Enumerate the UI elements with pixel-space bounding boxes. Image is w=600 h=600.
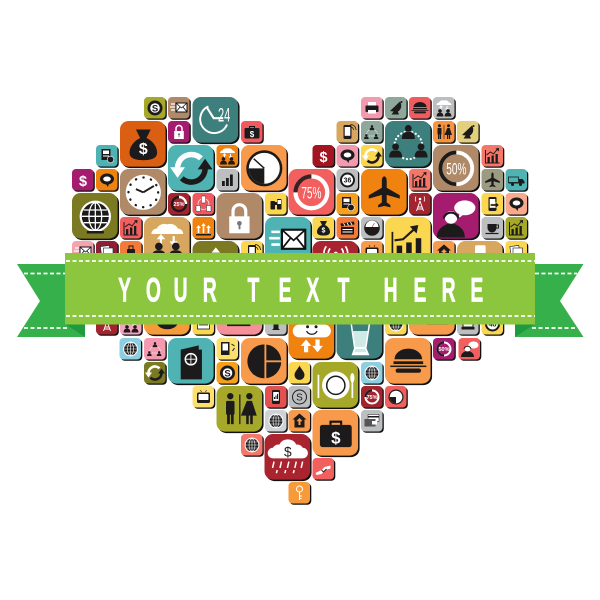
- icon tile: teal 24 hours: 24: [218, 104, 230, 126]
- icon tile: maroon documents: [96, 241, 119, 264]
- icon tile: money bag: [120, 121, 167, 168]
- icon tile: dark red dollar: [312, 145, 335, 168]
- icon tile: salmon chart: [482, 145, 504, 168]
- icon tile: sage network: [361, 121, 384, 144]
- icon tile: tan mail: [168, 97, 191, 120]
- icon tile: big teal refresh: [168, 145, 215, 192]
- icon tile: orange dollar coin: [216, 362, 239, 385]
- icon tile: money bag: $: [139, 141, 148, 158]
- icon tile: orange dollar coin: S: [224, 368, 231, 380]
- icon tile: big orange cloud smile: [288, 313, 336, 360]
- ribbon tail: right: [515, 264, 584, 337]
- icon tile: yellow television: [192, 386, 215, 409]
- icon tile: yellow 48 ring: 48: [489, 322, 496, 328]
- icon tile: big tan people with cloud: [144, 217, 191, 264]
- icon tile: big red money rain cloud: $: [284, 444, 292, 459]
- icon tile: grey bar chart: [216, 169, 239, 192]
- icon tile: grey coffee cup: [482, 217, 504, 240]
- icon tile: pink network: [144, 338, 167, 361]
- icon tile: olive chart: [506, 217, 528, 240]
- icon tile: orange document: [336, 193, 359, 216]
- icon tile: big orange clock: [241, 145, 288, 192]
- icon tile: orange clapperboard: [336, 217, 359, 240]
- icon tile: yellow money bag: $: [322, 228, 326, 234]
- icon tile: grey credit cards: [361, 410, 384, 433]
- icon tile: olive dollar coin: S: [152, 104, 158, 114]
- icon tile: magenta 50 percent ring: [433, 338, 456, 361]
- icon tile: teal document: [96, 145, 119, 168]
- icon tile: khaki satellite dish: [457, 121, 480, 144]
- icon tile: big orange briefcase: [312, 410, 360, 457]
- icon tile: yellow documents: [506, 241, 528, 264]
- icon tile: yellow phone forward: [482, 193, 504, 216]
- icon tile: yellow 48 ring: [482, 313, 504, 336]
- icon tile: big red 75 percent ring: [288, 169, 336, 216]
- icon tile: pink people: [120, 313, 143, 336]
- icon tile: salmon rising chart: [409, 169, 432, 192]
- banner title text: YOURTEXTHERE: [118, 271, 483, 309]
- icon tile: salmon globe: [241, 434, 264, 457]
- icon tile: big pink monitor: [216, 289, 264, 336]
- icon tile: yellow binoculars: [265, 193, 288, 216]
- icon tile: red headset agent: [458, 338, 481, 361]
- icon tile: dark red dollar: $: [320, 149, 328, 166]
- icon tile: red phone chart: [265, 386, 288, 409]
- icon tile: dark red 25 percent ring: 25%: [173, 202, 185, 208]
- icon tile: big orange bottom bar: [409, 289, 456, 336]
- icon tile: orange share: [288, 410, 311, 433]
- icon tile: big teal passport: [168, 338, 215, 385]
- icon tile: yellow document arrow: [216, 338, 239, 361]
- icon tile: grey dollar coin: S: [296, 392, 303, 404]
- icon tile: big orange burger: [385, 338, 432, 385]
- icon tile: orange key: [288, 482, 311, 505]
- icon tile: big red money rain cloud: [264, 434, 312, 481]
- icon tile: olive dollar coin: [144, 97, 167, 120]
- icon tile: light blue globe right: [361, 362, 384, 385]
- icon tile: grey 36 ring: [336, 169, 359, 192]
- icon tile: red clock: [385, 386, 408, 409]
- icon tile: big olive plate setting: [312, 362, 360, 409]
- icon tile: big tan 50 percent ring: [433, 145, 480, 192]
- icon tile: grey 36 ring: 36: [344, 178, 351, 184]
- icon tile: magenta 50 percent ring: 50%: [438, 347, 450, 353]
- icon tile: big orange pie chart: [241, 338, 288, 385]
- icon tile: big teal people circle: [385, 121, 432, 168]
- icon tile: orange toilets: [433, 121, 456, 144]
- icon tile: big tan lock: [216, 193, 264, 240]
- icon tile: dark red antenna: [409, 193, 432, 216]
- icon tile: orange growth arrows: [192, 217, 215, 240]
- icon tile: grey people: [433, 97, 456, 120]
- icon tile: light grey globe: [265, 410, 288, 433]
- icon tile: peach speech bubble: [506, 193, 528, 216]
- icon tile: grey gauge: [361, 217, 384, 240]
- icon tile: yellow globe: [385, 313, 408, 336]
- icon tile: orange speech bubble: [96, 169, 119, 192]
- icon tile: magenta lock: [168, 121, 191, 144]
- icon tile: big orange briefcase: $: [331, 428, 341, 447]
- icon tile: pink speech bubble: [336, 145, 359, 168]
- icon tile: big yellow growth chart: [385, 217, 432, 264]
- icon tile: grey dollar coin: [288, 386, 311, 409]
- icon tile: teal 24 hours: [192, 97, 240, 144]
- icon tile: red briefcase: [241, 121, 264, 144]
- icon tile: yellow refresh: [361, 145, 384, 168]
- icon tile: red rising chart: [120, 217, 143, 240]
- icon tile: taupe airplane: [482, 169, 504, 192]
- ribbon tail: left: [17, 264, 85, 337]
- icon tile: magenta dollar: $: [79, 173, 88, 190]
- icon tile: yellow water drop: [288, 362, 311, 385]
- banner: green ribbon body: [65, 253, 535, 324]
- icon tile: big tan phone: [457, 241, 504, 288]
- icon tile: big teal mail: [265, 217, 312, 264]
- icon tile: magenta dollar: [72, 169, 95, 192]
- icon tile: big tan clock: [120, 169, 167, 216]
- icon tile: sage satellite dish: [385, 97, 408, 120]
- icon tile: grey monitor: [457, 313, 480, 336]
- icon tile: big orange airplane: [361, 169, 408, 216]
- icon tile: red linked devices: [192, 193, 215, 216]
- icon tile: orange share arrow: [433, 241, 456, 264]
- icon tile: red briefcase: $: [250, 130, 255, 139]
- icon tile: grey pedestal: [265, 313, 288, 336]
- icon tile: big tan 50 percent ring: 50%: [446, 160, 466, 179]
- icon tile: big olive globe: [72, 193, 119, 240]
- icon tile: orange television: [361, 241, 384, 264]
- icon tile: pink mail: [72, 241, 95, 264]
- icon tile: dark red antenna lower: [96, 313, 119, 336]
- icon tile: light blue globe: [120, 338, 142, 361]
- icon tile: dark red 75 percent ring: 75%: [366, 395, 378, 401]
- icon tile: orange people: [216, 145, 239, 168]
- icon tile: big olive toilets: [216, 386, 264, 433]
- icon tile: big dark red signal: [312, 241, 360, 288]
- icon tile: olive refresh: [144, 362, 167, 385]
- icon tile: yellow money bag: [312, 217, 335, 240]
- icon tile: big magenta headset agent: [433, 193, 480, 240]
- icon tile: red burger: [409, 97, 432, 120]
- icon tile: red shoe hand: [312, 458, 335, 481]
- icon tile: yellow list: [192, 313, 215, 336]
- icon tile: dark red 25 percent ring: [168, 193, 191, 216]
- icon tile: dark red 75 percent ring: [361, 386, 384, 409]
- icon tile: yellow phone signal: [241, 241, 264, 264]
- icon tile: big teal glass: [336, 313, 384, 360]
- icon tile: big olive tile: [192, 241, 240, 288]
- icon tile: orange luggage: [120, 241, 143, 264]
- icon tile: big orange dish: [144, 289, 191, 336]
- icon tile: pink printer: [361, 97, 384, 120]
- icon tile: tan phone wifi: [336, 121, 359, 144]
- icon tile: teal truck: [506, 169, 528, 192]
- icon tile: big red 75 percent ring: 75%: [301, 184, 321, 203]
